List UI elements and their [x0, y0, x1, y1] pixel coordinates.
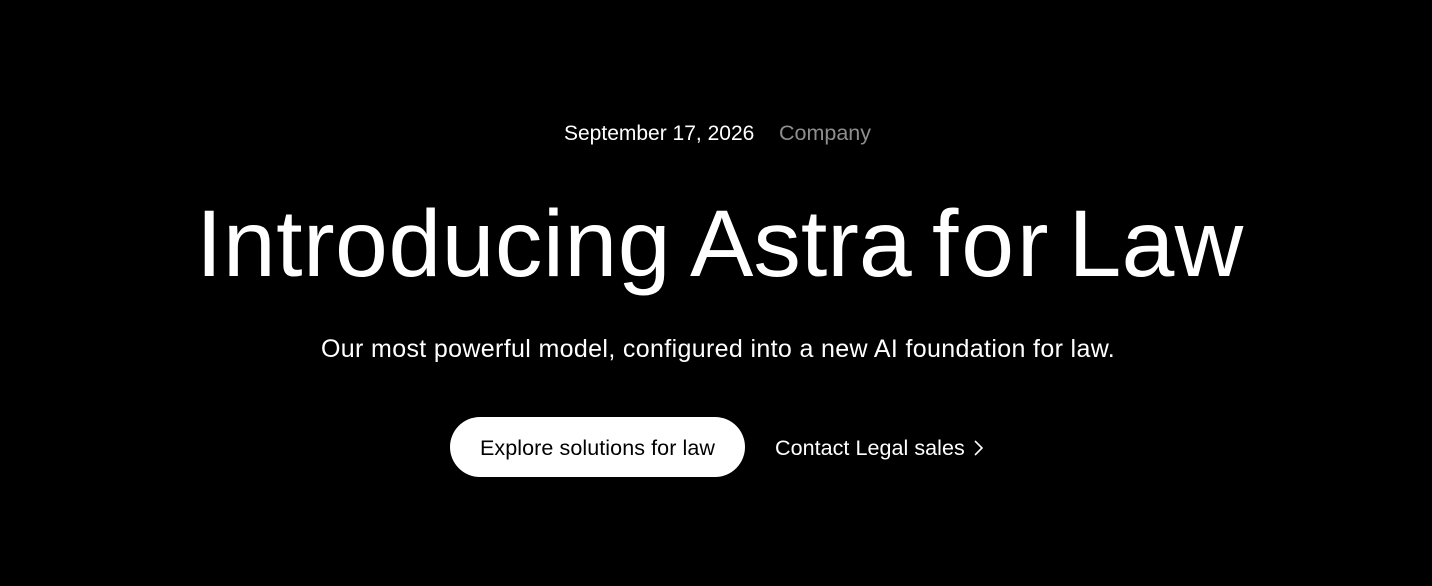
icon: chevron right	[974, 440, 983, 456]
primary button: Explore solutions for law	[480, 436, 715, 460]
primary button	[450, 417, 745, 477]
subtitle: Our most powerful model, configured into a new AI foundation for law.	[321, 335, 1115, 363]
title: Introducing	[196, 191, 671, 297]
secondary link: Contact Legal sales	[775, 436, 965, 460]
title: Law	[1068, 191, 1243, 297]
title	[196, 191, 1244, 297]
title: Astra	[690, 191, 912, 297]
category label: Company	[779, 121, 871, 145]
title: for	[932, 191, 1051, 297]
date: September 17, 2026	[564, 122, 754, 145]
